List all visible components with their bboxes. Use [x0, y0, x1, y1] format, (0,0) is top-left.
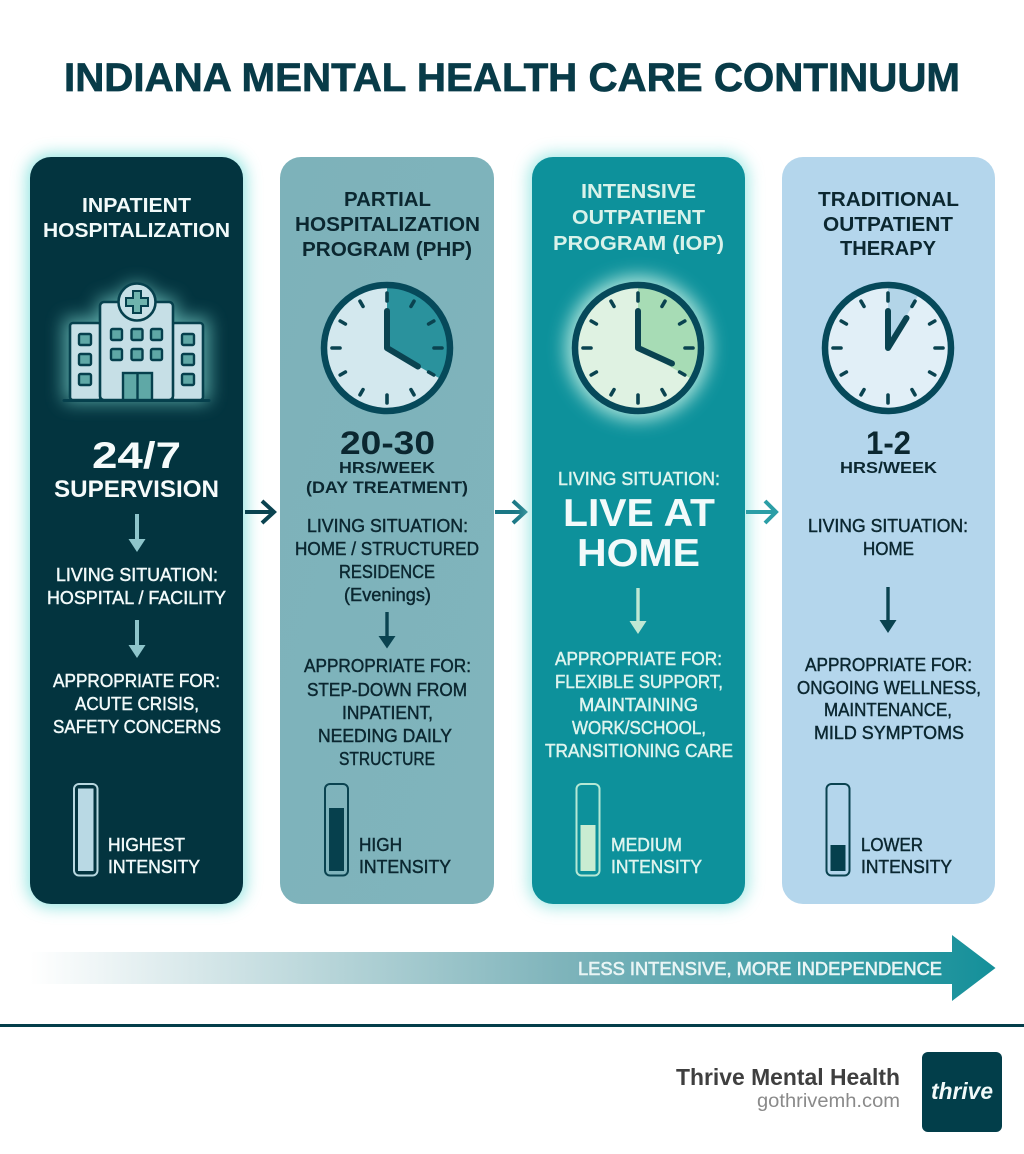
text: appropriate for: FLEXIBLE SUPPORT,: [555, 672, 723, 692]
heading: traditional outpatient therapy: OUTPATIENT: [823, 214, 953, 236]
label: lower intensity: [861, 835, 952, 877]
label: highest intensity: INTENSITY: [108, 857, 200, 877]
text: appropriate for: ONGOING WELLNESS,: [797, 678, 981, 698]
text: appropriate for: APPROPRIATE FOR:: [805, 655, 972, 675]
gauge: highest intensity: [74, 784, 98, 876]
heading: partial hospitalization program: [295, 189, 480, 261]
label: lower intensity: LOWER: [861, 835, 923, 855]
icon: clock 20-30 hours: [324, 285, 450, 411]
stat: 1-2 hrs per week: [840, 425, 937, 477]
text: living situation: [808, 516, 968, 559]
label: highest intensity: [108, 835, 200, 877]
heading: inpatient hospitalization: [43, 195, 230, 242]
text: appropriate for: APPROPRIATE FOR:: [53, 671, 220, 691]
text: appropriate for: SAFETY CONCERNS: [53, 717, 221, 737]
heading: traditional outpatient therapy: [818, 189, 959, 260]
label: high intensity: INTENSITY: [359, 857, 451, 877]
stat: 20-30 hrs per week: (DAY TREATMENT): [306, 478, 468, 497]
arrow: to intensive outpatient: [495, 501, 525, 523]
gauge: lower intensity: [826, 784, 850, 876]
label: medium intensity: [611, 835, 702, 877]
text: living situation: LIVING SITUATION:: [307, 516, 468, 536]
icon: clock 9-19 hours: [566, 276, 710, 420]
heading: partial hospitalization program: PARTIAL: [344, 189, 431, 211]
text: living situation: [47, 565, 226, 608]
arrow: down: [880, 587, 896, 633]
text: living situation: LIVING SITUATION:: [56, 565, 218, 585]
arrow: down: [378, 612, 395, 648]
text: living situation: [295, 516, 479, 605]
text: appropriate for: WORK/SCHOOL,: [572, 718, 706, 738]
label: medium intensity: INTENSITY: [611, 857, 702, 877]
heading: inpatient hospitalization: INPATIENT: [82, 195, 191, 217]
icon: clock 1-2 hours: [825, 285, 951, 411]
stat: 20-30 hrs per week: 20-30: [340, 425, 435, 461]
text: appropriate for: MILD SYMPTOMS: [814, 723, 964, 743]
gauge: high intensity: [325, 784, 348, 876]
text: appropriate for: [53, 671, 221, 737]
text: appropriate for: [545, 649, 733, 761]
label: medium intensity: MEDIUM: [611, 835, 682, 855]
stat: 20-30 hrs per week: [306, 425, 468, 497]
label: highest intensity: HIGHEST: [108, 835, 185, 855]
heading: intensive outpatient program: PROGRAM (IOP): [553, 233, 724, 255]
title: INDIANA MENTAL HEALTH CARE CONTINUUM: [64, 56, 960, 100]
text: appropriate for: INPATIENT,: [342, 703, 433, 723]
heading: inpatient hospitalization: HOSPITALIZATION: [43, 220, 230, 242]
panel: intensive outpatient program: [529, 154, 748, 907]
stat: live at home: [558, 469, 720, 575]
heading: intensive outpatient program: [553, 181, 724, 255]
text: living situation: LIVING SITUATION:: [808, 516, 968, 536]
heading: intensive outpatient program: OUTPATIENT: [572, 207, 705, 229]
heading: partial hospitalization program: PROGRAM (PHP): [302, 239, 472, 261]
panel: inpatient hospitalization: [27, 154, 246, 907]
arrow: to traditional outpatient: [746, 501, 776, 523]
stat: live at home: LIVING SITUATION:: [558, 469, 720, 489]
text: living situation: HOME: [863, 539, 914, 559]
text: appropriate for: STRUCTURE: [339, 749, 435, 769]
text: living situation: (Evenings): [344, 585, 431, 605]
panel: traditional outpatient therapy: [782, 157, 995, 904]
label: high intensity: [359, 835, 451, 877]
arrow: less intensive, more independence: [30, 935, 996, 1001]
label: lower intensity: INTENSITY: [861, 857, 952, 877]
heading: traditional outpatient therapy: TRADITIONAL: [818, 189, 959, 211]
arrow: less intensive, more independence: LESS INTENSIVE, MORE INDEPENDENCE: [578, 959, 942, 979]
stat: 24/7 supervision: 24/7: [92, 435, 181, 476]
icon: hospital building: [64, 284, 209, 402]
panel: partial hospitalization program: [280, 157, 494, 904]
logo: thrive: thrive: [931, 1078, 993, 1104]
heading: partial hospitalization program: HOSPITALIZATION: [295, 214, 480, 236]
footer brand text: Thrive Mental Health: [676, 1064, 900, 1090]
text: appropriate for: MAINTENANCE,: [824, 700, 952, 720]
text: appropriate for: MAINTAINING: [579, 695, 698, 715]
arrow: to partial hospitalization: [245, 501, 274, 523]
text: appropriate for: NEEDING DAILY: [318, 726, 452, 746]
stat: 20-30 hrs per week: HRS/WEEK: [339, 460, 435, 477]
text: living situation: HOME / STRUCTURED: [295, 539, 479, 559]
text: appropriate for: [304, 656, 471, 769]
text: appropriate for: APPROPRIATE FOR:: [304, 656, 471, 676]
stat: 24/7 supervision: [54, 435, 219, 503]
logo: thrive: [922, 1052, 1002, 1132]
stat: 1-2 hrs per week: HRS/WEEK: [840, 460, 937, 477]
stat: live at home: HOME: [577, 532, 700, 575]
arrow: down: [630, 588, 646, 634]
arrow: down: [128, 620, 146, 658]
arrow: down: [128, 514, 146, 552]
text: appropriate for: ACUTE CRISIS,: [75, 694, 199, 714]
text: living situation: HOSPITAL / FACILITY: [47, 588, 226, 608]
stat: 1-2 hrs per week: 1-2: [866, 425, 911, 461]
text: appropriate for: STEP-DOWN FROM: [307, 680, 467, 700]
label: high intensity: HIGH: [359, 835, 402, 855]
text: appropriate for: APPROPRIATE FOR:: [555, 649, 722, 669]
footer brand text: [676, 1064, 900, 1112]
text: appropriate for: [797, 655, 981, 743]
gauge: medium intensity: [576, 784, 600, 876]
text: living situation: RESIDENCE: [339, 562, 435, 582]
stat: live at home: LIVE AT: [563, 492, 715, 535]
stat: 24/7 supervision: SUPERVISION: [54, 476, 219, 503]
heading: intensive outpatient program: INTENSIVE: [581, 181, 696, 203]
text: appropriate for: TRANSITIONING CARE: [545, 741, 733, 761]
heading: traditional outpatient therapy: THERAPY: [840, 238, 937, 260]
footer brand text: gothrivemh.com: [757, 1091, 900, 1112]
